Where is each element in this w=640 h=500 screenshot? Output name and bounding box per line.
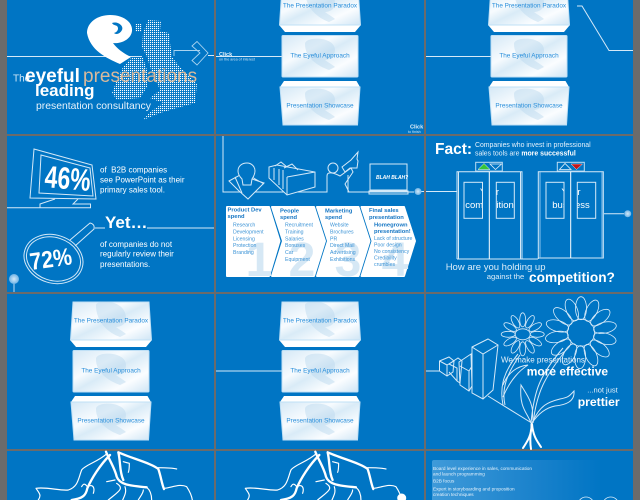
chevron 2: people spend: Salaries [285, 236, 304, 242]
text: more effective: We make presentations [501, 356, 585, 365]
chevron 1: product dev spend: Licensing [233, 236, 255, 242]
text: competition question: competition? [529, 270, 615, 285]
marker dot [414, 188, 422, 195]
chevron 3: marketing spend: Exhibitions [330, 257, 355, 263]
text: companies: Companies who invest in professional [475, 142, 591, 149]
roots [523, 424, 541, 449]
menu cards [488, 0, 570, 125]
text: 72 percent [100, 240, 174, 269]
text: credentials: and launch programming [433, 471, 485, 476]
icon: light bulb and papers [229, 163, 264, 199]
title [13, 66, 197, 112]
icon: magnifier with 72% [18, 223, 94, 291]
text: companies: sales tools are more successful [475, 150, 576, 157]
panel: menu top right [426, 0, 633, 134]
text: competition question [446, 262, 615, 285]
credentials box [432, 460, 602, 500]
text: 46 percent: of B2B companies [100, 166, 167, 174]
chevron 4: final sales presentation [362, 207, 415, 287]
chevron 2: people spend: Car [285, 250, 294, 256]
click hint: on the area of interest [219, 58, 255, 62]
menu cards: Presentation Showcase [77, 418, 145, 424]
menu cards: The Eyeful Approach [81, 368, 141, 374]
chevron 2: people spend: People [280, 208, 300, 214]
panel: fact elevators [426, 136, 633, 292]
chevron 4: final sales presentation: presentation! [374, 229, 411, 235]
panel: credentials [426, 451, 633, 500]
click hint: Click [219, 52, 233, 58]
chevron 4: final sales presentation: Lack of structure [374, 236, 412, 242]
panel: menu top centre [216, 0, 424, 134]
chevron 2: people spend: Bonuses [285, 243, 306, 249]
chevron 3: marketing spend: Marketing [325, 208, 353, 214]
panel: menu row 3 centre [216, 294, 424, 449]
text: credentials: Board level experience in sales, communication [433, 466, 532, 471]
chevron 3: marketing spend: 3 [335, 234, 361, 287]
elevator: your business [538, 162, 603, 259]
chevron 2: people spend: Training [285, 230, 304, 236]
click hint [219, 52, 255, 62]
petals hint [578, 497, 619, 500]
text: credentials [433, 466, 532, 497]
icon: laptop [369, 164, 408, 194]
heading: Fact: Fact: [435, 141, 472, 158]
menu cards: The Presentation Paradox [492, 2, 567, 10]
text: credentials: Expert in storyboarding and proposition [433, 487, 515, 492]
icon: laptop: BLAH BLAH? [376, 175, 408, 181]
text: not just prettier: prettier [578, 395, 620, 409]
bar chart growing [426, 339, 532, 423]
roots [36, 452, 192, 500]
text: 46 percent [100, 166, 185, 194]
text: 72 percent: presentations. [100, 260, 150, 269]
text: companies [475, 142, 591, 157]
click to finish: to finish [408, 130, 421, 134]
menu cards [70, 301, 152, 440]
panel: statistics [7, 136, 214, 292]
panel: flowers and bars [426, 294, 633, 449]
title: The [13, 74, 31, 84]
text: 46 percent: primary sales tool. [100, 185, 165, 194]
elevator: your competition: Your [480, 187, 499, 198]
heading: Yet: Yet… [105, 213, 148, 232]
click to finish: Click [410, 124, 424, 130]
text: credentials: B2B focus [433, 479, 455, 484]
chevron 4: final sales presentation: crumbles [374, 262, 395, 268]
text: more effective [501, 356, 608, 378]
chevron 1: product dev spend: Development [233, 230, 264, 236]
chevron 1: product dev spend: Product Dev [228, 208, 262, 214]
icon: person with megaphone [327, 152, 358, 192]
panel: menu row 3 left [7, 294, 214, 449]
elevator: your competition: competition [465, 200, 514, 211]
elevator: your competition [457, 162, 522, 259]
chevron 3: marketing spend [317, 207, 370, 287]
panel: intro [7, 0, 214, 134]
chevron 2: people spend: Recruitment [285, 223, 314, 229]
chevron 2: people spend: spend [280, 215, 298, 221]
icon: eyeful logo [87, 15, 132, 64]
menu cards: Presentation Showcase [286, 102, 354, 110]
icon: UK dot map [112, 20, 197, 120]
chevron 3: marketing spend: Direct Mail [330, 243, 354, 249]
text: 46 percent: see PowerPoint as their [100, 175, 185, 184]
text: more effective: more effective [527, 364, 608, 378]
chevron 2: people spend [272, 207, 325, 287]
icon: pin [9, 274, 19, 292]
chevron 4: final sales presentation: Poor design [374, 242, 402, 248]
text: competition question: against the [487, 272, 524, 281]
chevron 3: marketing spend: Advertising [330, 250, 356, 256]
text: 72 percent: regularly review their [100, 250, 174, 259]
chevron 2: people spend: 2 [289, 234, 315, 287]
text: 72 percent: of companies do not [100, 240, 173, 249]
title: eyeful [25, 66, 80, 87]
chevron 1: product dev spend: spend [228, 214, 245, 220]
chevron 1: product dev spend [227, 207, 280, 287]
icon: folders [269, 162, 315, 195]
menu cards: The Presentation Paradox [74, 318, 149, 324]
chevron 4: final sales presentation: No consistency [374, 249, 410, 255]
menu cards [280, 301, 360, 440]
elevator: your business: business [552, 200, 590, 211]
marker dot [624, 210, 631, 217]
panel: roots left [7, 451, 214, 500]
chevron 3: marketing spend: spend [325, 215, 343, 221]
title: presentations [83, 66, 197, 87]
menu cards [280, 0, 360, 125]
icon: magnifier with 72%: 72% [28, 243, 74, 275]
chevron 4: final sales presentation: presentation [369, 215, 404, 221]
chevron 1: product dev spend: Research [233, 223, 255, 229]
menu cards: Presentation Showcase [286, 418, 354, 424]
menu cards: The Presentation Paradox [283, 2, 358, 10]
menu cards: Presentation Showcase [495, 102, 563, 110]
chevron 4: final sales presentation: Credibility [374, 256, 397, 262]
text: competition question: How are you holding up [446, 262, 546, 273]
connector lines [426, 192, 624, 259]
icon: large flower [545, 297, 617, 369]
connector line [7, 56, 214, 57]
root tip blob [397, 494, 406, 500]
stems and leaves [502, 348, 574, 423]
chevron 4: final sales presentation: 4 [382, 234, 409, 287]
menu cards: The Eyeful Approach [499, 52, 559, 60]
icon: monitor with 46% [7, 149, 96, 208]
text: credentials: creation techniques [433, 492, 474, 497]
title: presentation consultancy [36, 101, 152, 112]
panel: spend process [216, 136, 424, 292]
text: not just prettier: ...not just [587, 386, 619, 395]
chevron 1: product dev spend: Protection [233, 243, 256, 249]
chevron 3: marketing spend: Website [330, 223, 349, 229]
title: leading [35, 81, 95, 100]
chevron 1: product dev spend: 1 [246, 234, 272, 287]
icon: small flower [501, 313, 544, 356]
chevron 2: people spend: Equipment [285, 257, 310, 263]
panel: roots centre [216, 451, 424, 500]
timeline line [223, 136, 424, 192]
roots [245, 452, 402, 500]
icon: arrow [174, 42, 208, 65]
chevron 1: product dev spend: Branding [233, 250, 254, 256]
menu cards: The Eyeful Approach [290, 368, 350, 374]
elevator: your business: Your [561, 187, 581, 198]
chevron 3: marketing spend: PR [330, 236, 337, 242]
chevron 4: final sales presentation: Homegrown [374, 223, 408, 229]
chevron 4: final sales presentation: Final sales [369, 208, 399, 214]
chevron 3: marketing spend: Brochures [330, 230, 354, 236]
icon: monitor with 46%: 46% [43, 159, 92, 198]
click to finish [408, 124, 424, 134]
menu cards: The Eyeful Approach [290, 52, 350, 60]
text: not just prettier [578, 386, 620, 409]
menu cards: The Presentation Paradox [283, 318, 358, 324]
